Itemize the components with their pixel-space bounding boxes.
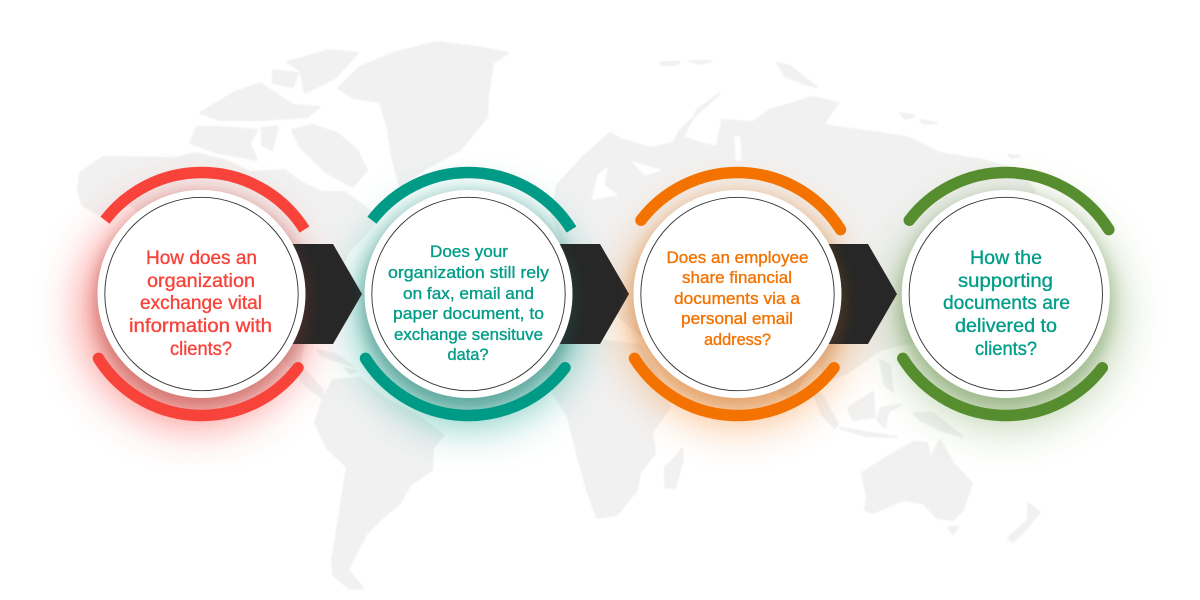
question text: personal email: [681, 309, 793, 328]
question text: Does your: [430, 242, 508, 261]
white disc: [364, 190, 572, 398]
map: Africa: [545, 340, 670, 518]
question text: paper document, to: [393, 304, 544, 323]
glow: green: [894, 200, 1118, 424]
inner shadow: [630, 194, 846, 410]
inner shadow: [360, 194, 576, 410]
top arc: [909, 173, 1109, 230]
inner ring: [909, 197, 1102, 391]
question text: documents via a: [674, 289, 801, 308]
panel: step 3: [630, 173, 846, 415]
map: inland seas: [592, 137, 741, 200]
map: North and Central America: [78, 153, 378, 398]
map: Tasmania: [948, 527, 958, 534]
inner ring: [372, 197, 565, 391]
map: Madagascar: [665, 448, 683, 488]
bottom arc: [366, 358, 565, 415]
bottom arc: [634, 358, 834, 415]
white disc: [98, 190, 306, 398]
question text: data?: [448, 345, 488, 364]
map: New Zealand: [1008, 503, 1040, 542]
white disc: [902, 190, 1110, 398]
question text: [388, 242, 550, 364]
map: South America: [315, 378, 444, 589]
question text: information with: [129, 316, 272, 337]
arrow: step 1 to 2: [280, 244, 362, 344]
question text: documents are: [943, 293, 1070, 314]
question text: organization: [147, 271, 255, 292]
map: Arctic Russian islands: [660, 61, 1020, 158]
question text: delivered to: [955, 316, 1057, 337]
panel: step 2: [360, 173, 576, 415]
question text: address?: [704, 330, 771, 349]
glow: orange: [625, 200, 849, 424]
top arc: [372, 173, 572, 230]
map: Europe and Asia: [552, 93, 1035, 400]
glow: red: [83, 200, 307, 424]
question text: supporting: [958, 271, 1053, 292]
question text: How the: [970, 248, 1042, 269]
inner ring: [105, 197, 298, 391]
inner shadow: [898, 194, 1114, 410]
map: Arctic islands: [190, 50, 367, 187]
question text: share financial: [682, 268, 792, 287]
question text: How does an: [146, 248, 257, 269]
map: Australia: [862, 440, 972, 520]
map: Southeast Asian islands: [813, 360, 963, 437]
question text: [129, 248, 272, 360]
white disc: [634, 190, 842, 398]
world map background: [78, 42, 1040, 589]
map: Caribbean islands: [317, 350, 356, 374]
question text: exchange sensituve: [394, 325, 543, 344]
question text: exchange vital: [140, 293, 262, 314]
glows: [83, 200, 1118, 424]
map: Greenland: [338, 42, 508, 187]
question text: on fax, email and: [403, 284, 534, 303]
inner shadow: [94, 194, 310, 410]
top arc: [641, 173, 840, 230]
glow: teal: [357, 200, 581, 424]
arrow: step 3 to 4: [820, 244, 897, 344]
panel: step 4: [898, 173, 1114, 415]
question text: [943, 248, 1070, 360]
bottom arc: [903, 358, 1102, 415]
inner ring: [641, 197, 834, 391]
arrow: step 2 to 3: [550, 244, 629, 344]
question text: clients?: [975, 339, 1037, 360]
bottom arc: [98, 358, 298, 415]
top arc: [105, 173, 304, 230]
question text: clients?: [170, 339, 232, 360]
question text: [666, 248, 808, 349]
question text: organization still rely: [388, 263, 550, 282]
question text: Does an employee: [666, 248, 808, 267]
panel: step 1: [94, 173, 310, 415]
